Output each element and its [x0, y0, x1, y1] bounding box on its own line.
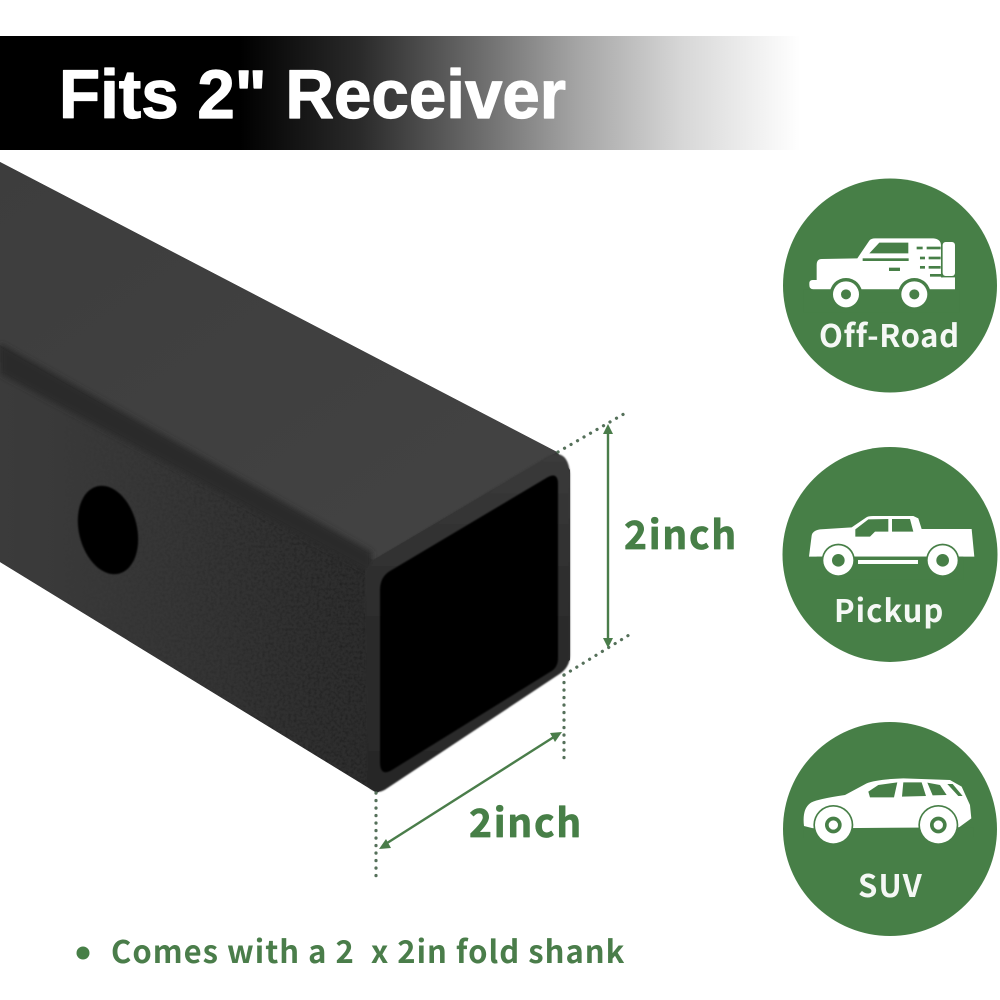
icon: off-road truck: [803, 238, 960, 313]
dotted guide lines: [558, 411, 629, 675]
label: SUV: SUV: [858, 861, 923, 906]
diagonal arrow: [379, 732, 562, 849]
feature note: [76, 927, 625, 972]
width dimension: 2inch: [376, 675, 583, 881]
badge circle: [782, 447, 998, 662]
icon: suv car: [803, 778, 974, 845]
bullet: [76, 946, 90, 960]
label: Off-Road: Off-Road: [819, 311, 960, 356]
badge circle: [783, 178, 997, 392]
tube silhouette: [0, 162, 570, 793]
height label: 2inch: [624, 505, 738, 561]
note text: Comes with a 2 x 2in fold shank: [111, 927, 625, 972]
title banner: [0, 36, 800, 150]
tube front rim: [365, 454, 570, 792]
badge: off-road: [783, 178, 997, 392]
tube side face: [0, 362, 377, 793]
width label: 2inch: [469, 793, 583, 849]
label: Pickup: Pickup: [834, 586, 944, 631]
dotted guide lines: [376, 675, 564, 881]
side surface grain: [230, 514, 365, 782]
height dimension: 2inch: [558, 411, 738, 675]
tube top face: [0, 162, 557, 560]
badge: suv: [783, 722, 997, 936]
tube opening: [380, 476, 558, 772]
title text: Fits 2" Receiver: [59, 56, 566, 133]
vertical arrow: [603, 424, 613, 648]
side hole: [69, 479, 147, 581]
icon: pickup truck: [809, 516, 974, 580]
badge circle: [783, 722, 997, 936]
product: square steel shank tube: [0, 162, 570, 795]
banner gradient bar: [0, 36, 800, 150]
tube corner ridge: [0, 343, 372, 574]
badge: pickup: [782, 447, 998, 662]
